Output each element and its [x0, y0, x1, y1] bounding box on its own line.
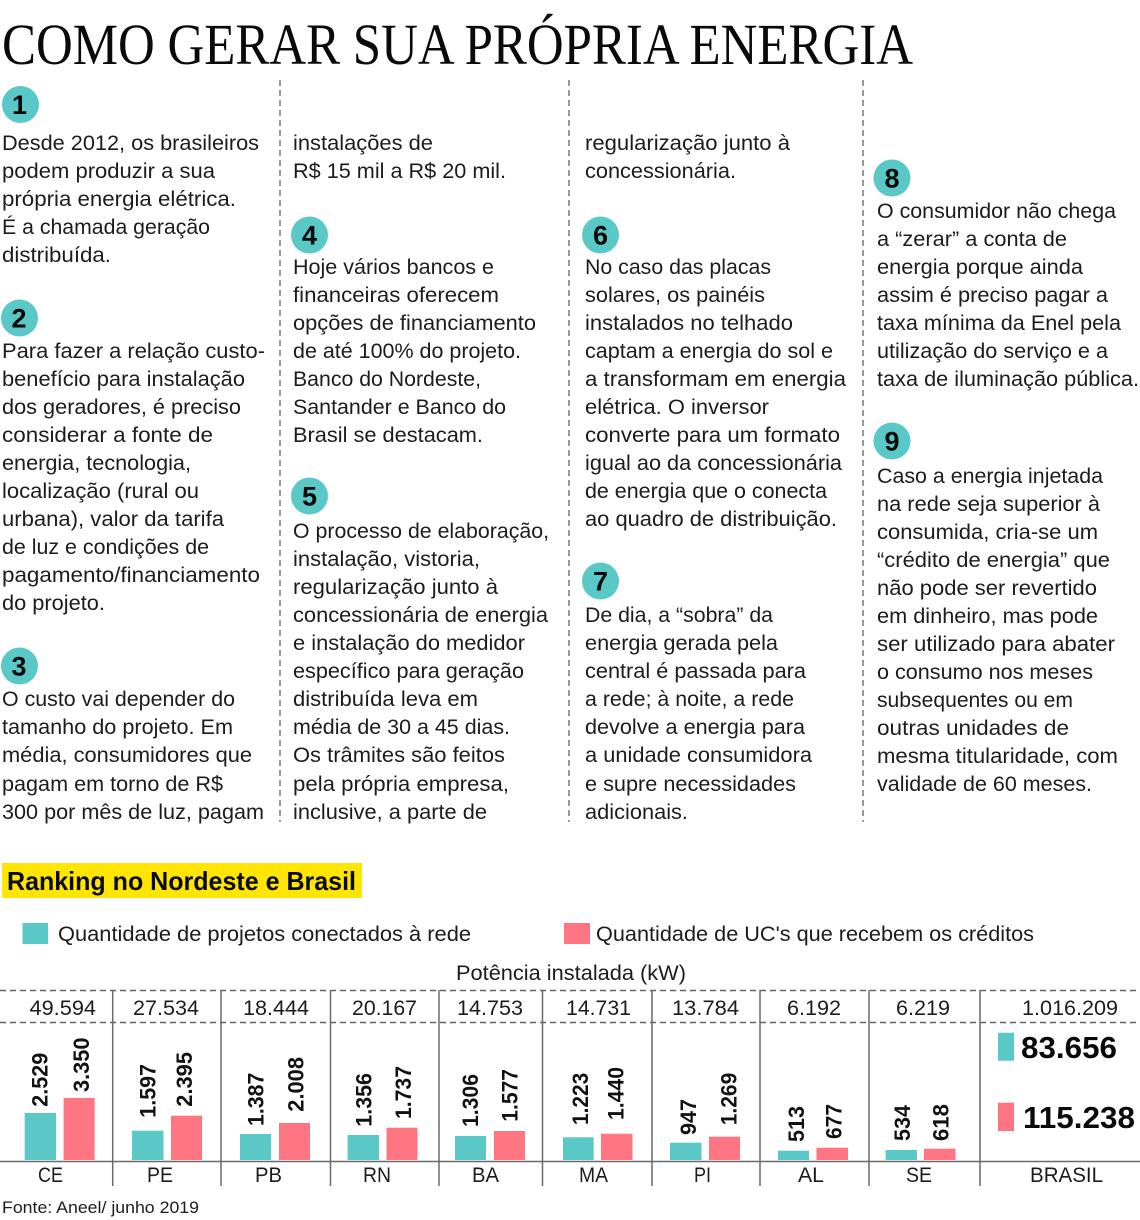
bars: AL: 677 — [822, 1104, 847, 1139]
step 8 text: taxa mínima da Enel pela — [877, 312, 1121, 335]
step 7 — [582, 562, 812, 824]
Brasil totals: 115.238 — [1023, 1100, 1135, 1135]
bars: PB: 2.008 — [284, 1057, 309, 1112]
step 3 text, continued: R$ 15 mil a R$ 20 mil. — [293, 160, 506, 183]
step 5 text, second column: inclusive, a parte de — [293, 801, 487, 824]
step 5 text, second column: concessionária de energia — [293, 604, 548, 627]
step 6 text — [585, 256, 846, 531]
step 2 text — [2, 340, 265, 615]
installed power values: 20.167 — [352, 997, 417, 1020]
badge 2 — [1, 300, 38, 336]
step 5 text, continued: regularização junto à — [585, 132, 790, 155]
badge 2: 2 — [11, 304, 27, 334]
step 8 text: taxa de iluminação pública. — [877, 368, 1139, 391]
state labels: SE — [906, 1164, 932, 1187]
step 6 text: No caso das placas — [585, 256, 771, 279]
step 5 — [291, 478, 549, 824]
bars: CE — [25, 1038, 95, 1160]
step 5 text, second column: instalação, vistoria, — [293, 548, 480, 571]
step 6 text: ao quadro de distribuição. — [585, 508, 837, 531]
badge 7: 7 — [593, 566, 608, 596]
state labels: AL — [798, 1164, 824, 1187]
step 6 text: igual ao da concessionária — [585, 452, 842, 475]
state labels: PI — [694, 1164, 711, 1187]
step 9 text: consumida, cria-se um — [877, 521, 1098, 544]
badge 7 — [582, 562, 619, 600]
step 6 text: captam a energia do sol e — [585, 340, 833, 363]
bars: RN: 1.356 — [352, 1073, 377, 1127]
step 5 text, second column: média de 30 a 45 dias. — [293, 716, 510, 739]
step 1 text: distribuída. — [2, 244, 111, 267]
badge 4 — [291, 216, 328, 254]
state labels — [38, 1164, 1103, 1187]
badge 5 — [291, 478, 328, 514]
step 8 — [874, 160, 1139, 391]
step 2 text: localização (rural ou — [2, 480, 199, 503]
step 6 text: solares, os painéis — [585, 284, 765, 307]
step 4 text: de até 100% do projeto. — [293, 340, 521, 363]
step 6 text: de energia que o conecta — [585, 480, 827, 503]
bars: PB: 1.387 — [244, 1073, 269, 1126]
bars: MA — [563, 1067, 632, 1160]
step 7 text: De dia, a “sobra” da — [585, 604, 773, 627]
step 1 — [2, 86, 259, 267]
step 3 text, first column: média, consumidores que — [2, 744, 252, 767]
bars: RN — [348, 1066, 418, 1160]
step 9 text: em dinheiro, mas pode — [877, 605, 1098, 628]
step 7 text: a unidade consumidora — [585, 744, 812, 767]
step 9 text: na rede seja superior à — [877, 493, 1100, 516]
bars: PE: 2.395 — [172, 1052, 197, 1107]
bars: SE — [886, 1104, 956, 1160]
step 2 text: energia, tecnologia, — [2, 452, 191, 475]
step 5 text, continued — [585, 132, 790, 183]
step 6 — [582, 216, 846, 531]
badge 3: 3 — [11, 652, 27, 682]
step 7 text: e supre necessidades — [585, 773, 796, 796]
title: COMO GERAR SUA PRÓPRIA ENERGIA — [2, 12, 913, 77]
badge 8 — [874, 160, 910, 196]
step 5 text, second column: O processo de elaboração, — [293, 520, 549, 543]
step 5 text, continued: concessionária. — [585, 160, 736, 183]
bars: RN: 1.737 — [391, 1066, 416, 1119]
installed power values: 18.444 — [243, 997, 309, 1020]
step 3 text, first column: 300 por mês de luz, pagam — [2, 801, 264, 824]
step 7 text: energia gerada pela — [585, 632, 778, 655]
ranking heading: Ranking no Nordeste e Brasil — [7, 866, 356, 896]
step 7 text: adicionais. — [585, 801, 688, 824]
step 9 text: validade de 60 meses. — [877, 773, 1092, 796]
step 4 text: Hoje vários bancos e — [293, 256, 494, 279]
step 9 — [874, 422, 1118, 796]
bars: SE: 618 — [928, 1104, 954, 1141]
badge 4: 4 — [302, 220, 317, 250]
Brasil totals — [998, 1030, 1135, 1135]
bars: PI: 947 — [676, 1099, 701, 1135]
step 8 text — [877, 200, 1139, 391]
step 2 text: considerar a fonte de — [2, 424, 213, 447]
step 4 text: Brasil se destacam. — [293, 424, 483, 447]
state labels: MA — [579, 1164, 608, 1187]
step 5 text, second column: específico para geração — [293, 660, 524, 683]
step 3 text, continued — [293, 132, 506, 183]
step 6 text: instalados no telhado — [585, 312, 793, 335]
step 3 text, first column: tamanho do projeto. Em — [2, 716, 233, 739]
installed power values: 49.594 — [30, 997, 96, 1020]
badge 1 — [2, 86, 39, 123]
bars: PI — [670, 1073, 742, 1160]
state labels: BRASIL — [1030, 1164, 1103, 1187]
badge 9: 9 — [884, 426, 900, 456]
installed power values — [30, 997, 1118, 1020]
bars: MA: 1.440 — [604, 1067, 628, 1120]
bars: BA: 1.306 — [458, 1074, 483, 1127]
step 4 text — [293, 256, 536, 447]
bar chart — [25, 1038, 955, 1160]
installed power values: 1.016.209 — [1022, 997, 1118, 1020]
bars: BA: 1.577 — [498, 1069, 522, 1122]
step 4 text: opções de financiamento — [293, 312, 536, 335]
step 9 text: outras unidades de — [877, 717, 1069, 740]
step 9 text: mesma titularidade, com — [877, 745, 1118, 768]
step 2 text: de luz e condições de — [2, 536, 209, 559]
bars: PE — [132, 1052, 202, 1160]
step 2 — [1, 300, 265, 615]
step 5 text, second column: pela própria empresa, — [293, 773, 509, 796]
step 3 text, first column: O custo vai depender do — [2, 688, 235, 711]
step 3 text, first column — [2, 688, 264, 824]
badge 1: 1 — [12, 90, 27, 120]
bars: BA — [455, 1069, 525, 1160]
step 1 text: Desde 2012, os brasileiros — [2, 132, 259, 155]
step 1 text: É a chamada geração — [2, 216, 210, 239]
step 5 text, second column: distribuída leva em — [293, 688, 478, 711]
state labels: PB — [255, 1164, 282, 1187]
source: Fonte: Aneel/ junho 2019 — [2, 1198, 199, 1217]
badge 9 — [874, 422, 910, 460]
step 1 text: própria energia elétrica. — [2, 188, 236, 211]
installed power values: 6.219 — [896, 997, 950, 1020]
step 8 text: assim é preciso pagar a — [877, 284, 1108, 307]
step 7 text: central é passada para — [585, 660, 806, 683]
step 2 text: do projeto. — [2, 592, 105, 615]
badge 6 — [582, 216, 619, 254]
step 9 text: Caso a energia injetada — [877, 465, 1103, 488]
installed power values: 6.192 — [787, 997, 841, 1020]
step 7 text: devolve a energia para — [585, 716, 805, 739]
Brasil totals: 83.656 — [1021, 1030, 1117, 1065]
step 4 text: Banco do Nordeste, — [293, 368, 481, 391]
installed power values: 14.753 — [457, 997, 523, 1020]
bars: AL: 513 — [784, 1106, 809, 1142]
bars: CE: 3.350 — [69, 1038, 94, 1092]
step 4 text: financeiras oferecem — [293, 284, 499, 307]
badge 8: 8 — [884, 164, 900, 194]
bars: PI: 1.269 — [716, 1073, 742, 1125]
step 5 text, second column — [293, 520, 549, 824]
step 7 text: a rede; à noite, a rede — [585, 688, 794, 711]
installed power values: 27.534 — [133, 997, 199, 1020]
badge 5: 5 — [302, 482, 317, 512]
step 9 text: o consumo nos meses — [877, 661, 1093, 684]
legend: consumer units receiving credits: Quantidade de UC's que recebem os créditos — [596, 923, 1034, 946]
state labels: PE — [147, 1164, 173, 1187]
step 9 text — [877, 465, 1118, 796]
installed power heading: Potência instalada (kW) — [456, 962, 686, 985]
state labels: RN — [363, 1164, 391, 1187]
legend: projects connected: Quantidade de projetos conectados à rede — [58, 923, 471, 946]
badge 6: 6 — [593, 220, 608, 250]
step 1 text: podem produzir a sua — [2, 160, 215, 183]
step 5 text, second column: Os trâmites são feitos — [293, 744, 505, 767]
step 3 text, continued: instalações de — [293, 132, 433, 155]
step 5 text, second column: regularização junto à — [293, 576, 498, 599]
step 5 text, second column: e instalação do medidor — [293, 632, 525, 655]
bars: PE: 1.597 — [136, 1064, 161, 1118]
step 8 text: O consumidor não chega — [877, 200, 1116, 223]
step 6 text: a transformam em energia — [585, 368, 846, 391]
step 4 text: Santander e Banco do — [293, 396, 506, 419]
step 2 text: pagamento/financiamento — [2, 564, 260, 587]
bars: CE: 2.529 — [28, 1053, 53, 1107]
step 6 text: converte para um formato — [585, 424, 840, 447]
step 8 text: energia porque ainda — [877, 256, 1083, 279]
step 3 — [1, 648, 264, 824]
step 2 text: dos geradores, é preciso — [2, 396, 241, 419]
step 8 text: utilização do serviço e a — [877, 340, 1108, 363]
step 1 text — [2, 132, 259, 267]
state labels: CE — [38, 1164, 63, 1187]
bars: AL — [778, 1104, 848, 1160]
installed power values: 13.784 — [672, 997, 739, 1020]
step 9 text: “crédito de energia” que — [877, 549, 1110, 572]
step 2 text: Para fazer a relação custo- — [2, 340, 265, 363]
step 7 text — [585, 604, 812, 824]
installed power values: 14.731 — [566, 997, 631, 1020]
bars: PB — [240, 1057, 310, 1160]
step 9 text: subsequentes ou em — [877, 689, 1073, 712]
step 2 text: benefício para instalação — [2, 368, 245, 391]
bars: MA: 1.223 — [568, 1073, 593, 1125]
step 2 text: urbana), valor da tarifa — [2, 508, 224, 531]
step 8 text: a “zerar” a conta de — [877, 228, 1067, 251]
state labels: BA — [472, 1164, 499, 1187]
step 3 text, first column: pagam em torno de R$ — [2, 773, 223, 796]
step 9 text: não pode ser revertido — [877, 577, 1097, 600]
step 9 text: ser utilizado para abater — [877, 633, 1115, 656]
badge 3 — [1, 648, 38, 684]
step 6 text: elétrica. O inversor — [585, 396, 769, 419]
step 4 — [291, 216, 536, 447]
bars: SE: 534 — [890, 1104, 915, 1141]
